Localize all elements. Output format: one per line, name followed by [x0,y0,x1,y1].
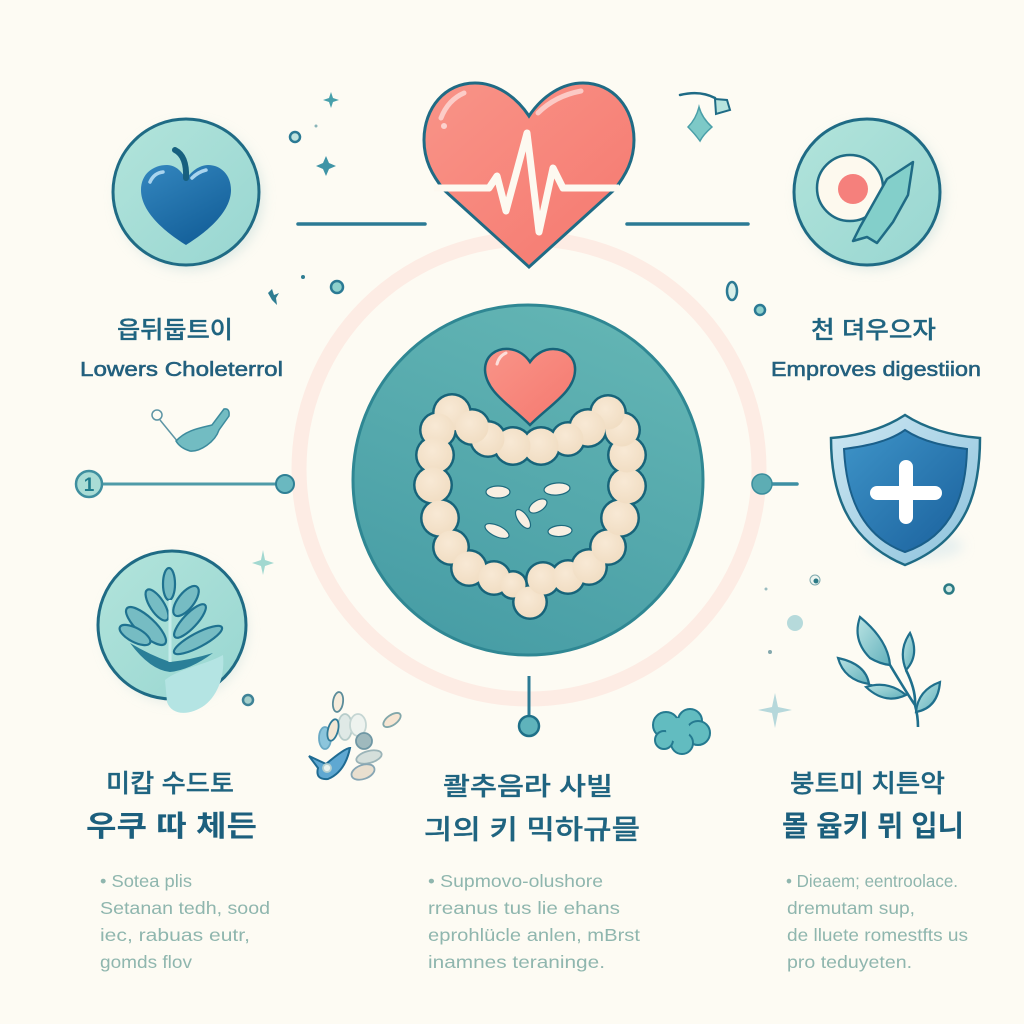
text block: left column: • Sotea plis [100,871,192,891]
icon: leaf sprig [838,617,940,727]
connector: right [752,474,797,494]
text: lowers cholesterol: 읍뒤둡트이 [117,317,233,344]
text block: middle column: • Supmovo-olushore [428,871,603,891]
text block: left column: 미캅 수드토 [106,770,234,798]
text block: right column: de lluete romestfts us [787,925,968,945]
icon: spoon charm [152,409,229,451]
icon: small heart [485,349,575,425]
icon: seed pile [309,691,403,783]
text: lowers cholesterol [80,317,283,381]
text block: right column: 붕트미 치튼악 [790,770,945,798]
text block: left column: iec, rabuas eutr, [100,925,250,945]
text: improves digestion [771,317,981,381]
text block: right column: 몰 윱키 뮈 입니 [782,810,964,843]
text block: left column [86,770,270,972]
text block: middle column: rreanus tus lie ehans [428,898,620,918]
text block: middle column [424,773,640,972]
text block: right column: dremutam sup, [787,898,915,918]
central teal circle [353,305,703,655]
text block: right column [782,770,968,972]
connector lines by heart [298,222,748,226]
text block: middle column: 콸추음라 사빌 [443,773,613,801]
icon: top right leaf charm [680,93,730,141]
icon: blue apple heart badge [113,119,263,270]
text block: left column: 우쿠 따 체든 [86,810,257,843]
text block: middle column: eprohlücle anlen, mBrst [428,925,640,945]
pink ring [299,239,759,699]
text: improves digestion: 천 뎌우으자 [811,317,936,344]
icon: large heart with pulse [424,83,634,267]
text block: middle column: inamnes teraninge. [428,952,605,972]
text: improves digestion: Emproves digestiion [771,359,981,381]
connector: bottom [519,676,539,736]
icon: flower cluster [653,709,710,754]
illustration: colon [413,393,647,620]
seeds inside colon [483,482,572,541]
text block: right column: • Dieaem; eentroolace. [786,871,958,891]
text: lowers cholesterol: Lowers Choleterrol [80,359,283,381]
connector: left numbered [76,471,294,497]
text block: right column: pro teduyeten. [787,952,912,972]
text block: middle column: 긔의 키 믹하규믈 [424,815,640,845]
icon: shield with plus [831,415,980,565]
icon: egg and leaf badge [794,119,944,269]
icon: leaf badge [98,551,247,713]
connector: left numbered: 1 [84,475,95,496]
text block: left column: Setanan tedh, sood [100,898,270,918]
decorative sparkles and dots [243,92,954,728]
text block: left column: gomds flov [100,952,192,972]
